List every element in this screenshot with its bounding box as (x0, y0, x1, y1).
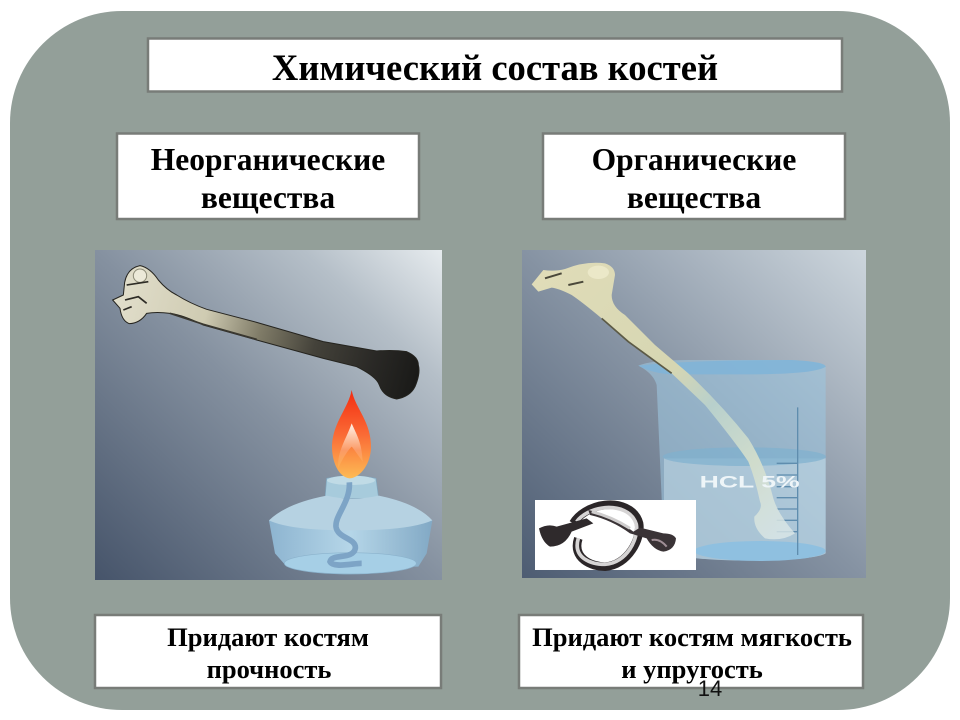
caption: organic effect: и упругость (621, 654, 763, 684)
title box: Химический состав костей (272, 47, 718, 88)
panel: bone over flame illustration (95, 250, 442, 580)
panel: bone in acid illustration (522, 250, 866, 578)
icon: charred bone (113, 266, 419, 399)
heading: organic substances: Органические (592, 142, 796, 177)
heading: inorganic substances (117, 134, 419, 219)
caption: organic effect (519, 615, 863, 688)
heading: organic substances: вещества (627, 180, 761, 215)
caption: organic effect: Придают костям мягкость (532, 622, 852, 652)
heading: inorganic substances: вещества (201, 180, 335, 215)
slide number: 14 (698, 676, 722, 701)
icon: spirit lamp (269, 476, 432, 574)
caption: inorganic effect: прочность (207, 654, 331, 684)
heading: organic substances (543, 134, 845, 219)
inset: knotted bone (535, 500, 696, 570)
heading: inorganic substances: Неорганические (151, 142, 385, 177)
caption: inorganic effect: Придают костям (167, 622, 369, 652)
title box (148, 38, 842, 92)
icon: beaker with acid (638, 360, 826, 561)
caption: inorganic effect (95, 615, 441, 688)
icon: softened bone (532, 263, 795, 539)
label: HCL 5%: HCL 5% (700, 473, 800, 492)
icon: flame (332, 390, 371, 478)
